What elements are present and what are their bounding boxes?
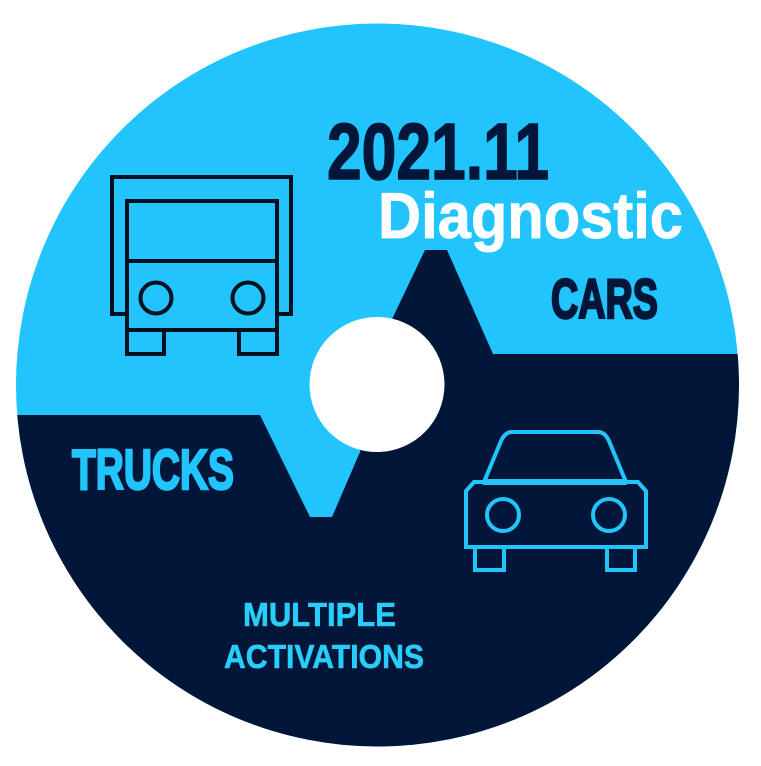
label: TRUCKS: TRUCKS [72,438,234,502]
title: version: 2021.11 [327,107,549,196]
label: ACTIVATIONS: ACTIVATIONS [224,638,424,675]
title: Diagnostic: Diagnostic [378,179,683,252]
label: CARS: CARS [551,267,658,330]
center hole [310,317,444,452]
icon: car [466,432,646,570]
icon: truck [112,177,291,354]
label: MULTIPLE: MULTIPLE [243,596,396,633]
